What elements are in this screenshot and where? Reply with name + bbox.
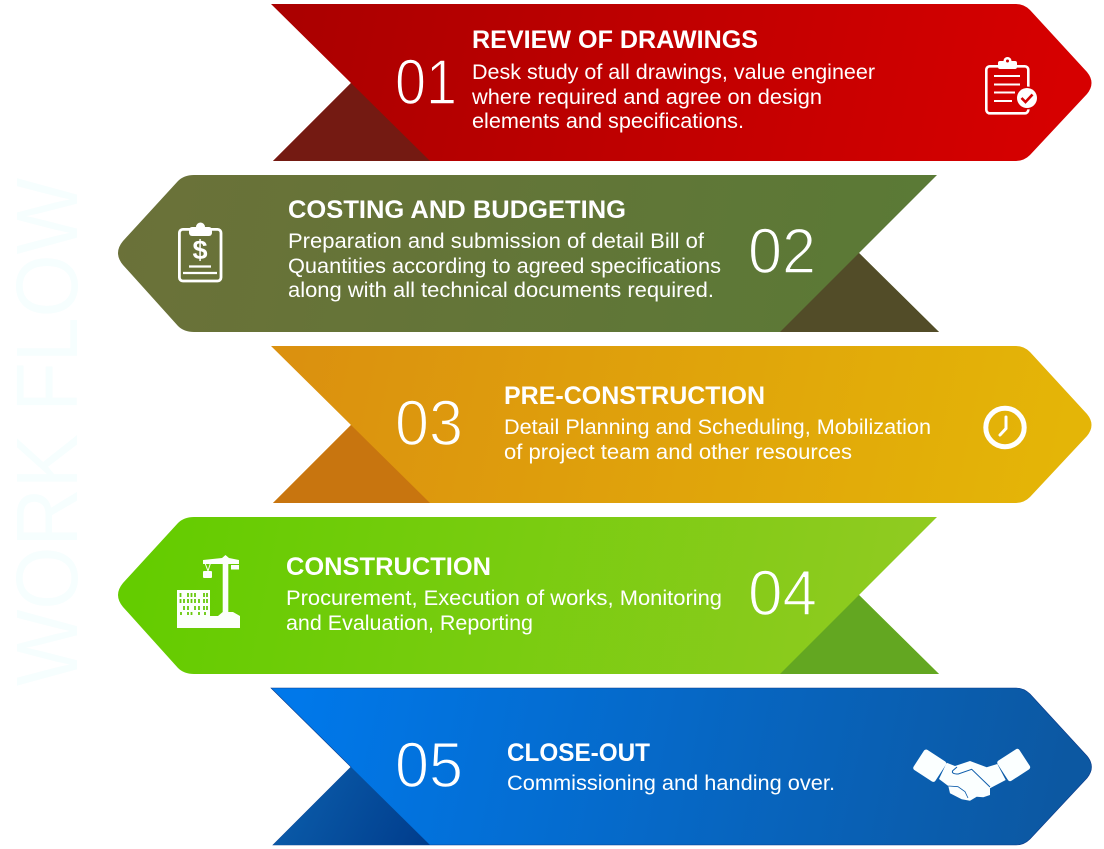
body text 03: of project team and other resources	[504, 440, 852, 464]
ribbon 05 shape	[271, 688, 1092, 845]
body text 01: elements and specifications.	[472, 109, 744, 133]
body text 05: Commissioning and handing over.	[507, 771, 835, 795]
number 01: 01	[395, 46, 457, 118]
ribbon 03 shape	[271, 346, 1092, 503]
number 03: 03	[395, 387, 463, 459]
body text 02	[288, 229, 721, 302]
ribbon 01 shape	[271, 4, 1092, 161]
icon: clipboard with dollar: $	[192, 235, 208, 265]
vertical watermark title: WORK FLOW: WORK FLOW	[0, 178, 96, 686]
panel: step 01 review of drawings	[271, 4, 1092, 161]
panel: step 02 costing and budgeting	[118, 175, 939, 332]
body text 03	[504, 415, 931, 464]
ribbon 04 shape	[118, 517, 939, 674]
body text 02: along with all technical documents required.	[288, 278, 714, 302]
ribbon 05 fold	[273, 767, 430, 845]
ribbon 04 fold	[780, 595, 939, 674]
number 05: 05	[395, 729, 463, 801]
body text 02: Quantities according to agreed specifications	[288, 254, 721, 278]
number 04: 04	[748, 557, 817, 629]
heading 02: COSTING AND BUDGETING	[288, 196, 626, 224]
body text 02: Preparation and submission of detail Bill of	[288, 229, 704, 253]
ribbon 03 fold	[273, 425, 430, 503]
number 02: 02	[748, 215, 816, 287]
heading 04: CONSTRUCTION	[286, 553, 491, 581]
panel: step 03 pre-construction	[271, 346, 1092, 503]
icon: handshake	[912, 748, 1031, 801]
icon: clock	[986, 408, 1024, 447]
body text 01	[471, 60, 875, 133]
body text 04	[286, 586, 722, 635]
heading 03: PRE-CONSTRUCTION	[504, 382, 765, 410]
heading 05: CLOSE-OUT	[507, 739, 650, 767]
heading 01: REVIEW OF DRAWINGS	[472, 26, 758, 54]
icon: clipboard with dollar	[179, 222, 221, 281]
panel: step 04 construction	[118, 517, 939, 674]
panel: step 05 close-out	[271, 688, 1092, 845]
body text 04: and Evaluation, Reporting	[286, 611, 533, 635]
icon: crane and building	[177, 555, 240, 628]
body text 03: Detail Planning and Scheduling, Mobilization	[504, 415, 931, 439]
body text 01: Desk study of all drawings, value engineer	[472, 60, 875, 84]
ribbon 02 shape	[118, 175, 939, 332]
ribbon 02 fold	[780, 253, 939, 332]
body text 04: Procurement, Execution of works, Monitoring	[286, 586, 722, 610]
icon: clipboard with check	[986, 57, 1038, 113]
body text 01: where required and agree on design	[471, 85, 822, 109]
ribbon 01 fold	[273, 83, 430, 161]
